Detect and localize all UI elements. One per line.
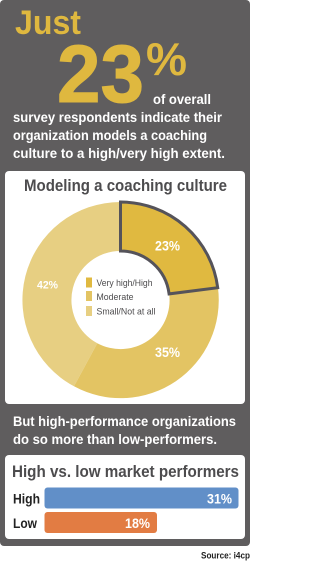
row: low: 18% [125, 516, 150, 531]
intro text: organization models a coaching [13, 127, 207, 143]
heading: Just 23%: % [146, 33, 187, 85]
row: low [13, 512, 157, 533]
heading: Just 23% [15, 4, 187, 120]
chart title: Modeling a coaching culture [24, 177, 227, 195]
row: high [13, 488, 238, 508]
slice labels: 35% [155, 344, 180, 360]
intro text: of overall [153, 91, 211, 107]
panel: bar chart [5, 455, 245, 539]
slice: moderate 35% [74, 288, 219, 398]
row: high: High [13, 492, 40, 506]
panel: donut chart [5, 171, 245, 404]
row: high: 31% [207, 492, 232, 506]
legend [86, 278, 156, 318]
legend: Moderate [96, 292, 134, 303]
intro text [13, 91, 225, 161]
slice labels: 42% [37, 280, 58, 292]
subheading text: do so more than low-performers. [13, 431, 217, 447]
subheading text: But high-performance organizations [13, 413, 236, 429]
slice: small/not at all 42% [22, 202, 121, 386]
background panel [0, 0, 250, 546]
heading: Just 23%: 23 [57, 29, 144, 120]
legend: Very high/High [96, 278, 152, 289]
intro text: culture to a high/very high extent. [13, 145, 225, 161]
subheading text [13, 413, 236, 447]
donut chart [22, 202, 219, 398]
legend: Small/Not at all [96, 306, 156, 318]
heading: Just 23%: Just [15, 4, 81, 42]
slice labels [37, 238, 180, 360]
intro text: survey respondents indicate their [13, 109, 223, 125]
slice: very high/high 23% [120, 202, 218, 294]
slice labels: 23% [155, 238, 180, 254]
row: low: Low [13, 516, 37, 531]
